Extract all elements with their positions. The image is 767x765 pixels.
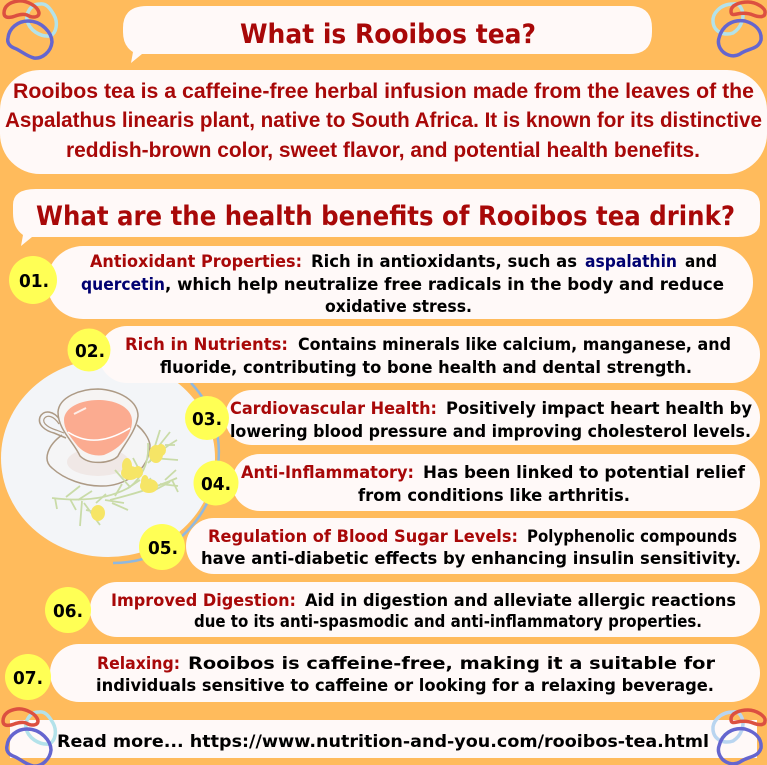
item 05: Polyphenolic compounds — [527, 527, 737, 547]
health benefits heading bubble — [13, 189, 760, 246]
item 04: Anti-Inflammatory: — [241, 463, 414, 483]
badge 04 — [194, 460, 238, 506]
read more bar — [10, 720, 757, 758]
item 06 — [45, 582, 760, 637]
item 07: individuals sensitive to caffeine or looking for a relaxing beverage. — [96, 676, 714, 696]
item 03: Positively impact heart health by — [446, 399, 752, 419]
item 07 — [5, 644, 760, 702]
item 02: Contains minerals like calcium, manganese, and — [298, 335, 731, 355]
read more bar: Read more... https://www.nutrition-and-you.com/rooibos-tea.html — [57, 732, 709, 752]
item 01: quercetin — [81, 275, 165, 295]
item 02 — [68, 326, 760, 383]
panel: intro: Aspalathus linearis plant, native to South Africa. It is known for its distinctive — [5, 109, 762, 132]
item 06: Aid in digestion and alleviate allergic reactions — [305, 591, 736, 611]
item 05: have anti-diabetic effects by enhancing insulin sensitivity. — [201, 549, 741, 569]
title bubble — [123, 6, 652, 63]
title: What is Rooibos tea? — [240, 19, 536, 50]
icon: squiggle top-right — [713, 2, 765, 56]
item 01 — [9, 246, 753, 319]
item 01: Rich in antioxidants, such as — [311, 252, 577, 272]
badge 05 — [139, 524, 185, 570]
item 01: oxidative stress. — [325, 297, 472, 317]
item 04: Has been linked to potential relief — [423, 463, 746, 483]
icon: squiggle bottom-right — [713, 710, 765, 764]
item 05: Regulation of Blood Sugar Levels: — [208, 527, 518, 547]
item 07: Rooibos is caffeine-free, making it a suitable for — [188, 654, 716, 674]
icon: rooibos sprig — [52, 430, 178, 526]
item 01: , which help neutralize free radicals in the body and reduce — [165, 275, 724, 295]
item 01: aspalathin — [585, 252, 677, 272]
item 06: due to its anti-spasmodic and anti-inflammatory properties. — [194, 612, 702, 632]
illustration: tea plate — [1, 359, 219, 563]
icon: cup — [39, 389, 138, 476]
icon: squiggle bottom-left — [3, 709, 55, 765]
panel: intro: reddish-brown color, sweet flavor, and potential health benefits. — [66, 139, 700, 162]
badge 01 — [9, 256, 57, 304]
badge 06 — [45, 587, 91, 633]
badge 05: 05. — [148, 538, 178, 559]
panel: intro — [0, 70, 767, 174]
badge 01: 01. — [19, 271, 49, 292]
badge 07: 07. — [13, 668, 43, 689]
badge 02: 02. — [75, 341, 105, 362]
badge 02 — [68, 328, 110, 372]
item 02: fluoride, contributing to bone health and dental strength. — [160, 358, 692, 378]
item 07: Relaxing: — [97, 654, 180, 674]
badge 07 — [5, 654, 51, 700]
item 05 — [139, 518, 760, 574]
badge 06: 06. — [53, 601, 83, 622]
item 02: Rich in Nutrients: — [125, 335, 288, 355]
item 01: and — [685, 252, 717, 272]
badge 03: 03. — [192, 409, 222, 430]
panel: intro: Rooibos tea is a caffeine-free herbal infusion made from the leaves of the — [13, 80, 754, 103]
item 06: Improved Digestion: — [111, 591, 296, 611]
badge 03 — [185, 396, 229, 440]
icon: squiggle top-left — [4, 1, 56, 58]
item 03: Cardiovascular Health: — [230, 399, 437, 419]
icon: saucer — [47, 425, 150, 486]
badge 04: 04. — [201, 474, 231, 495]
item 04 — [194, 454, 760, 511]
item 01: Antioxidant Properties: — [90, 252, 302, 272]
item 04: from conditions like arthritis. — [358, 486, 630, 506]
item 03 — [185, 390, 760, 445]
